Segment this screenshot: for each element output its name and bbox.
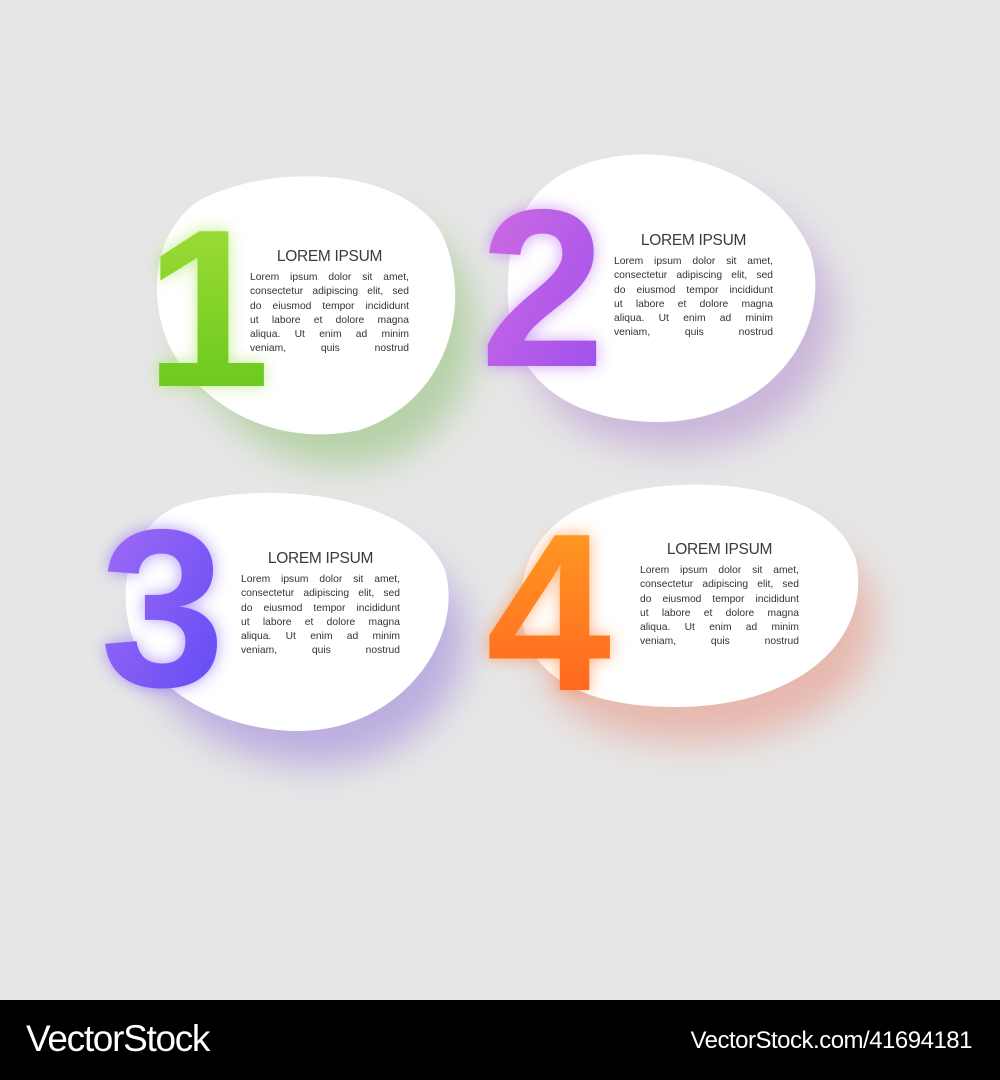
footer url: VectorStock.com/41694181 [690,1027,972,1054]
text block 3: veniam, quis nostrud [241,645,400,656]
text block 3: do eiusmod tempor incididunt [241,603,400,614]
number 4: 4 [486,486,611,738]
text block 3: aliqua. Ut enim ad minim [241,631,400,642]
text block 3 [241,550,400,656]
text block 4: veniam, quis nostrud [640,636,799,647]
text block 1 [250,248,409,354]
text block 2: aliqua. Ut enim ad minim [614,313,773,324]
footer [0,1000,1000,1080]
text block 3: ut labore et dolore magna [241,617,400,628]
text block 4: ut labore et dolore magna [640,608,799,619]
text block 4 [640,541,799,647]
text block 1: veniam, quis nostrud [250,343,409,354]
number 1: 1 [145,182,270,434]
panel 2 [480,154,835,450]
text block 2: veniam, quis nostrud [614,327,773,338]
text block 1: Lorem ipsum dolor sit amet, [250,272,409,283]
number 1: 1 [145,182,270,434]
text block 1: aliqua. Ut enim ad minim [250,329,409,340]
number 3: 3 [100,482,225,734]
text block 3: Lorem ipsum dolor sit amet, [241,574,400,585]
text block 1: do eiusmod tempor incididunt [250,301,409,312]
number 2: 2 [480,162,605,414]
text block 1: LOREM IPSUM [277,248,382,265]
footer logo: VectorStock [26,1018,209,1059]
text block 2: Lorem ipsum dolor sit amet, [614,256,773,267]
text block 4: aliqua. Ut enim ad minim [640,622,799,633]
number 4: 4 [486,486,611,738]
text block 3: LOREM IPSUM [268,550,373,567]
panel 1 [145,176,475,466]
text block 1: consectetur adipiscing elit, sed [250,286,409,297]
number 3: 3 [100,482,225,734]
panel 4 [486,484,875,742]
number 2: 2 [480,162,605,414]
text block 4: Lorem ipsum dolor sit amet, [640,565,799,576]
text block 2: consectetur adipiscing elit, sed [614,270,773,281]
text block 4: consectetur adipiscing elit, sed [640,579,799,590]
text block 2 [614,232,773,338]
text block 2: ut labore et dolore magna [614,299,773,310]
text block 4: LOREM IPSUM [667,541,772,558]
text block 4: do eiusmod tempor incididunt [640,594,799,605]
panel 3 [100,482,465,765]
text block 2: LOREM IPSUM [641,232,746,249]
text block 1: ut labore et dolore magna [250,315,409,326]
text block 2: do eiusmod tempor incididunt [614,285,773,296]
text block 3: consectetur adipiscing elit, sed [241,588,400,599]
